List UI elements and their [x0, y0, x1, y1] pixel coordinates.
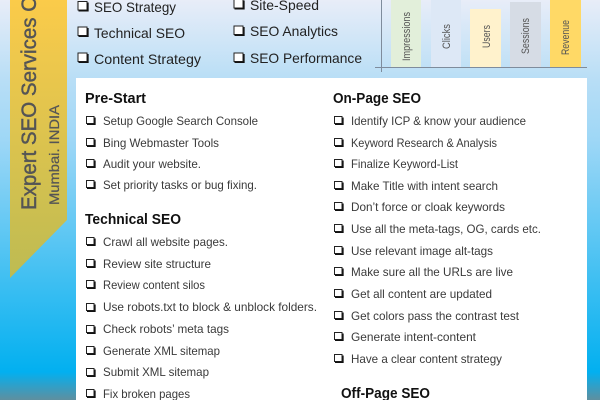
bar: Impressions — [391, 0, 421, 67]
list: Technical SEO: Generate XML sitemap — [103, 344, 220, 358]
top services checklist, right column: SEO Performance — [250, 50, 362, 66]
list: Technical SEO: Review site structure — [103, 257, 211, 271]
top services checklist, right column: SEO Analytics — [250, 23, 338, 39]
bar chart — [375, 0, 587, 72]
list: Technical SEO: Review content silos — [103, 278, 205, 292]
top services checklist, right column — [234, 0, 362, 66]
white checklist panel — [76, 78, 587, 400]
top services checklist, left column: Technical SEO — [94, 25, 185, 41]
list: On-Page SEO — [334, 114, 541, 366]
list: On-Page SEO: Have a clear content strategy — [351, 352, 502, 366]
list: Technical SEO: Check robots’ meta tags — [103, 322, 229, 336]
list: Technical SEO: Submit XML sitemap — [103, 365, 209, 379]
list: On-Page SEO: Generate intent-content — [351, 330, 477, 344]
banner location: Mumbai. INDIA — [46, 104, 62, 205]
list: On-Page SEO: Finalize Keyword-List — [351, 157, 459, 171]
list: Pre-Start — [86, 114, 258, 192]
list: On-Page SEO: Identify ICP & know your audience — [351, 114, 526, 128]
bar: Users — [470, 9, 501, 67]
list: Pre-Start: Audit your website. — [103, 157, 201, 171]
list: Technical SEO: Use robots.txt to block & unblock folders. — [103, 300, 317, 314]
heading: Pre-Start: Pre-Start — [85, 91, 146, 107]
bar: Clicks — [431, 0, 461, 67]
bar: Impressions: Impressions — [401, 12, 413, 61]
bar: Sessions — [510, 2, 541, 67]
list: On-Page SEO: Get colors pass the contrast test — [351, 309, 520, 323]
bar: Revenue — [550, 0, 581, 67]
top services checklist, left column — [78, 0, 201, 67]
list: On-Page SEO: Get all content are updated — [351, 287, 492, 301]
list: On-Page SEO: Use all the meta-tags, OG, cards etc. — [351, 222, 541, 236]
bar: Users: Users — [481, 25, 493, 48]
bar: Clicks: Clicks — [441, 24, 453, 49]
bar: Sessions: Sessions — [520, 18, 532, 54]
list: On-Page SEO: Don’t force or cloak keywords — [351, 200, 505, 214]
list: On-Page SEO: Make sure all the URLs are live — [351, 265, 513, 279]
top services checklist, left column: Content Strategy — [94, 51, 201, 67]
list: Pre-Start: Set priority tasks or bug fixing. — [103, 178, 257, 192]
heading: On-Page SEO: On-Page SEO — [333, 91, 421, 107]
banner ribbon — [10, 0, 67, 278]
list: Technical SEO — [86, 235, 317, 400]
list: Technical SEO: Crawl all website pages. — [103, 235, 228, 249]
list: On-Page SEO: Keyword Research & Analysis — [351, 136, 497, 150]
bar: Revenue: Revenue — [560, 20, 572, 55]
heading: Technical SEO: Technical SEO — [85, 212, 181, 228]
list: On-Page SEO: Make Title with intent search — [351, 179, 498, 193]
list: On-Page SEO: Use relevant image alt-tags — [351, 244, 493, 258]
list: Pre-Start: Bing Webmaster Tools — [103, 136, 219, 150]
list: Pre-Start: Setup Google Search Console — [103, 114, 258, 128]
